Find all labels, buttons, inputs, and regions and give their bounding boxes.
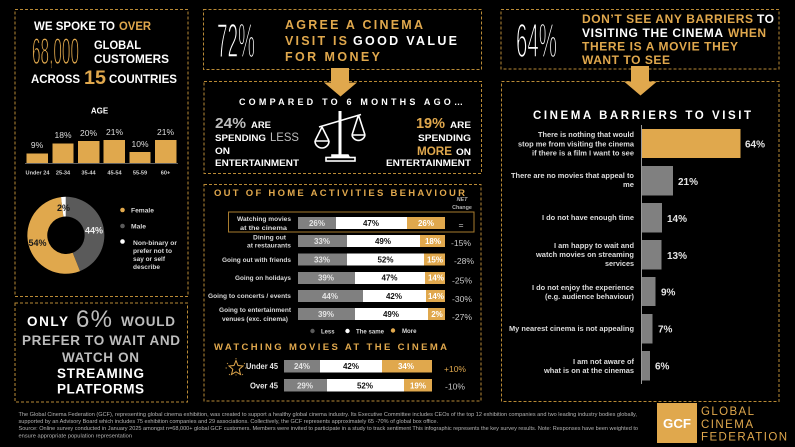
bar chart: barriers: 21% xyxy=(678,177,698,188)
text: global customers xyxy=(94,40,169,66)
bar chart: age xyxy=(25,127,178,176)
net change values: = xyxy=(458,220,464,230)
row labels: at restaurants xyxy=(247,242,291,250)
panel: only 6% would prefer streaming: WOULD xyxy=(121,314,175,329)
text: 19% spending more: ARE xyxy=(450,120,472,131)
net change values xyxy=(451,220,474,322)
bar labels: watch movies on streaming xyxy=(535,250,634,259)
stacked bar chart: activities: 49% xyxy=(375,237,391,246)
text: 24% spending less: ON xyxy=(215,146,230,157)
stacked bar chart: activities: 26% xyxy=(309,219,325,228)
stacked bar chart: activities: 47% xyxy=(381,274,398,282)
bar labels: I am happy to wait and xyxy=(554,241,634,250)
text: 19% spending more: ENTERTAINMENT xyxy=(386,158,471,169)
logo: Global Cinema Federation: GLOBAL xyxy=(701,406,755,418)
bar labels xyxy=(509,130,635,375)
chart title: age: AGE xyxy=(91,106,109,116)
heading: we spoke to over xyxy=(34,21,152,33)
text: agree a cinema visit is good value for money: FOR MONEY xyxy=(285,50,381,64)
bar chart: age: 9% xyxy=(31,140,44,150)
legend: less same more: More xyxy=(402,328,417,335)
stacked bar chart: age split: 29% xyxy=(297,382,313,390)
text: across 15 countries xyxy=(31,68,177,89)
text: no barriers statement xyxy=(582,12,774,67)
legend: gender: Non-binary or xyxy=(133,240,177,247)
bar chart: age: 35-44 xyxy=(81,170,97,176)
bar labels: I do not enjoy the experience xyxy=(532,283,634,292)
icon: balance scales xyxy=(315,111,365,161)
bar chart: barriers: 14% xyxy=(667,214,687,225)
footer text: The Global Cinema Federation (GCF), representing global cinema exhibition, was created to support a healthy global cinema industry. Its Executive Committee includes CEOs of the top 12 exhibition companies and two leading industry bodies globally, xyxy=(18,412,637,418)
bar labels: if there is a film I want to see xyxy=(532,148,634,158)
stacked bar chart: activities: 26% xyxy=(418,219,434,228)
bar labels: (e.g. audience behaviour) xyxy=(545,292,635,301)
stacked bar chart: activities: 42% xyxy=(386,292,402,301)
arrow: statement to barriers xyxy=(624,66,657,96)
footer text: supported by an Advisory Board which includes 75 exhibition companies and 29 associations. Collectively, the GCF represents approximately 65 -70% of global box office. xyxy=(18,419,438,425)
net change values: -15% xyxy=(451,238,471,248)
heading: we spoke to over: WE SPOKE TO xyxy=(34,21,115,33)
label: net change xyxy=(452,197,472,211)
labels: age split: Under 45 xyxy=(246,362,279,371)
net change values: -28% xyxy=(454,256,474,266)
text: agree a cinema visit is good value for money: AGREE A CINEMA xyxy=(285,18,423,32)
text: no barriers statement: VISITING THE CINEMA xyxy=(582,26,723,40)
text: across 15 countries: 15 xyxy=(84,68,106,89)
bar chart: age: 55-59 xyxy=(133,170,147,176)
net change values: -30% xyxy=(452,294,472,304)
text: no barriers statement: WHEN xyxy=(728,26,766,40)
panel: 64% no barriers xyxy=(501,10,779,69)
text: across 15 countries: ACROSS xyxy=(31,74,80,86)
bar chart: barriers xyxy=(641,125,765,384)
text: 19% spending more: MORE xyxy=(417,146,452,158)
stacked bar chart: age split: 52% xyxy=(357,382,373,390)
bar labels: stop me from visiting the cinema xyxy=(518,140,635,148)
stacked bar chart: activities xyxy=(298,217,445,320)
bar chart: age: 21% xyxy=(157,127,174,137)
bar labels: There is nothing that would xyxy=(538,130,634,139)
bar chart: barriers: 7% xyxy=(658,324,673,336)
heading: cinema barriers to visit: CINEMA BARRIERS TO VISIT xyxy=(533,110,751,122)
bar chart: age: 10% xyxy=(131,139,149,149)
icon: star xyxy=(226,358,246,376)
row labels: Going on holidays xyxy=(235,275,291,282)
donut chart: gender: 44% xyxy=(85,226,103,236)
panel: survey reach and demographics: 68,000 xyxy=(32,31,79,72)
panel: only 6% would prefer streaming xyxy=(15,303,188,402)
text: 24% spending less: 24% xyxy=(215,115,246,132)
text: global customers: CUSTOMERS xyxy=(94,54,169,66)
stacked bar chart: activities: 14% xyxy=(428,274,444,282)
stacked bar chart: activities: 44% xyxy=(322,292,338,301)
bar labels: I do not have enough time xyxy=(542,213,634,222)
bar chart: age: 20% xyxy=(80,128,97,138)
text: agree a cinema visit is good value for money: GOOD VALUE xyxy=(353,34,457,48)
text: 19% spending more xyxy=(386,116,472,169)
net change: age split xyxy=(444,364,466,392)
stacked bar chart: activities: 52% xyxy=(377,256,394,264)
row labels: Going to entertainment xyxy=(219,307,292,314)
legend: less same more: The same xyxy=(356,328,384,336)
text: 19% spending more: SPENDING xyxy=(418,133,471,144)
text: 19% spending more: ON xyxy=(456,147,471,158)
panel: cinema barriers to visit xyxy=(502,82,779,402)
logo: Global Cinema Federation: FEDERATION xyxy=(701,432,787,444)
panel: only 6% would prefer streaming: WATCH ON xyxy=(62,350,139,365)
net change values: -27% xyxy=(452,312,472,322)
label: net change: NET xyxy=(457,197,468,203)
bar chart: age: 45-54 xyxy=(107,170,123,176)
donut chart: gender xyxy=(27,197,104,274)
bar chart: age: 18% xyxy=(54,130,72,140)
text: 24% spending less: ARE xyxy=(251,120,272,131)
row labels xyxy=(208,216,292,323)
stacked bar chart: age split: 19% xyxy=(410,382,426,390)
bar labels: I am not aware of xyxy=(573,357,635,366)
label: net change: Change xyxy=(452,205,472,211)
row labels: Dining out xyxy=(253,234,287,242)
text: no barriers statement: DON’T SEE ANY BARRIERS xyxy=(582,12,753,26)
bar chart: age: 21% xyxy=(106,127,123,137)
text: 24% spending less xyxy=(215,115,299,169)
labels: age split xyxy=(246,362,279,390)
text: across 15 countries: COUNTRIES xyxy=(109,74,177,86)
stacked bar chart: age split: 24% xyxy=(294,362,310,371)
stacked bar chart: activities: 18% xyxy=(425,237,441,246)
bar chart: age: Under 24 xyxy=(26,170,50,176)
row labels: Going to concerts / events xyxy=(208,293,291,300)
text: agree a cinema visit is good value for money xyxy=(285,18,457,64)
legend: gender xyxy=(120,208,177,271)
stacked bar chart: age split: 34% xyxy=(398,362,414,371)
panel: only 6% would prefer streaming: PREFER TO WAIT AND xyxy=(22,333,180,348)
heading: compared to 6 months ago: COMPARED TO 6 MONTHS AGO… xyxy=(239,97,463,107)
bar chart: age: 60+ xyxy=(161,170,171,176)
legend: less same more xyxy=(310,328,417,336)
stacked bar chart: activities: 39% xyxy=(318,274,334,282)
stacked bar chart: activities: 14% xyxy=(428,292,444,301)
bar labels: me xyxy=(623,180,634,189)
panel: out of home activities behaviour xyxy=(204,184,481,401)
donut chart: gender: 2% xyxy=(57,203,70,213)
net change: age split: +10% xyxy=(444,364,466,374)
logo: Global Cinema Federation: CINEMA xyxy=(701,419,753,431)
bar labels: services xyxy=(605,259,634,268)
panel: only 6% would prefer streaming: STREAMING xyxy=(57,366,144,381)
text: no barriers statement: TO xyxy=(757,12,774,26)
stacked bar chart: activities: 15% xyxy=(427,256,443,264)
stacked bar chart: activities: 33% xyxy=(314,237,330,246)
text: 24% spending less: LESS xyxy=(270,132,299,144)
panel: 64% no barriers: 64% xyxy=(516,15,557,68)
bar chart: barriers: 6% xyxy=(655,362,670,372)
bar labels: There are no movies that appeal to xyxy=(511,171,635,180)
bar labels: My nearest cinema is not appealing xyxy=(509,324,634,333)
stacked bar chart: activities: 47% xyxy=(363,219,379,228)
heading: we spoke to over: OVER xyxy=(119,21,152,33)
stacked bar chart: activities: 2% xyxy=(431,310,443,319)
bar chart: age: 25-34 xyxy=(56,170,71,176)
stacked bar chart: activities: 33% xyxy=(314,256,330,264)
text: global customers: GLOBAL xyxy=(94,40,141,52)
footer text xyxy=(18,412,638,440)
row labels: Going out with friends xyxy=(222,257,291,264)
legend: gender: Female xyxy=(131,208,154,214)
legend: gender: prefer not to xyxy=(133,248,172,255)
logo: Global Cinema Federation: GCF xyxy=(663,416,691,431)
bar labels: what is on at the cinemas xyxy=(543,366,634,375)
footer text: ensure appropriate population representation xyxy=(18,434,132,440)
logo: Global Cinema Federation xyxy=(657,403,787,444)
stacked bar chart: age split xyxy=(284,360,432,392)
panel: survey reach and demographics xyxy=(15,10,188,296)
panel: only 6% would prefer streaming: ONLY xyxy=(27,314,68,329)
heading: watching movies at the cinema: WATCHING MOVIES AT THE CINEMA xyxy=(214,342,447,353)
labels: age split: Over 45 xyxy=(250,382,279,390)
text: agree a cinema visit is good value for money: VISIT IS xyxy=(285,34,347,48)
legend: less same more: Less xyxy=(321,328,335,336)
stacked bar chart: activities: 39% xyxy=(318,310,334,319)
legend: gender: Male xyxy=(131,224,146,230)
stacked bar chart: activities: 49% xyxy=(383,310,399,319)
heading: out of home activities behaviour: OUT OF HOME ACTIVITIES BEHAVIOUR xyxy=(214,188,465,199)
net change values: -25% xyxy=(452,276,472,286)
bar chart: barriers: 9% xyxy=(661,288,676,298)
panel: compared to 6 months ago xyxy=(204,82,482,174)
legend: gender: say or self xyxy=(133,256,166,263)
bar chart: barriers: 64% xyxy=(745,140,765,150)
panel: 72% good value xyxy=(204,10,482,70)
row labels: at the cinema xyxy=(240,225,287,232)
text: no barriers statement: THERE IS A MOVIE THEY xyxy=(582,40,738,54)
bar chart: barriers: 13% xyxy=(667,251,687,262)
footer text: Source: Online survey conducted in January 2025 amongst n=68,000+ global GCF customers. Members were invited to participate in a study to track sentiment This infographic represents the key survey results. Note: Responses have been weighted to xyxy=(18,426,638,432)
panel: only 6% would prefer streaming: 6% xyxy=(76,306,112,333)
row labels: Watching movies xyxy=(237,216,291,223)
row labels: venues (exc. cinema) xyxy=(222,316,288,323)
net change: age split: -10% xyxy=(445,382,465,392)
text: 19% spending more: 19% xyxy=(416,116,445,132)
text: 24% spending less: SPENDING xyxy=(215,133,266,144)
text: no barriers statement: WANT TO SEE xyxy=(582,53,670,67)
stacked bar chart: age split: 42% xyxy=(343,362,359,371)
panel: only 6% would prefer streaming: PLATFORMS xyxy=(57,382,144,396)
donut chart: gender: 54% xyxy=(28,238,47,248)
arrow: value to spending xyxy=(324,68,357,96)
legend: gender: describe xyxy=(133,264,160,271)
text: 24% spending less: ENTERTAINMENT xyxy=(215,158,299,169)
panel: 72% good value: 72% xyxy=(217,15,255,68)
highlight box: cinema row xyxy=(228,212,474,232)
